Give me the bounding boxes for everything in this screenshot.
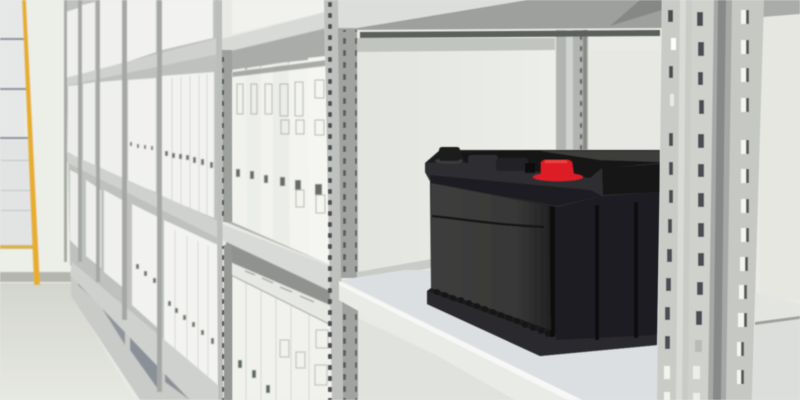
upright holes column one [664,10,676,400]
battery top surface [460,150,660,178]
lower shelf bay boxes [226,240,332,400]
box seams [172,74,208,383]
upper box tops [232,0,325,34]
battery [425,147,660,356]
far left wall [0,0,72,285]
negative terminal [435,147,463,164]
upright at x=220 [216,0,232,400]
floor plinth under shelves [71,266,218,400]
front shelf under space [358,318,530,400]
upright central groove [708,0,734,400]
battery vent caps [468,155,535,173]
battery silhouette [425,150,660,356]
back shelf upright [556,30,588,150]
upright main left channel [657,0,716,400]
receding upper shelf backs and boxes [65,0,218,400]
middle shelf upright at x=325 [324,0,358,400]
battery front right face [556,188,660,340]
battery base ribs [434,289,551,337]
floor [0,283,135,400]
receding shelf uprights [64,0,162,392]
distant boxes [0,0,34,249]
battery left side face [431,183,551,330]
middle shelf bay boxes [226,26,331,265]
right side shelf section [752,292,800,400]
battery lid [425,162,660,207]
front shelf upright [657,0,764,400]
red positive terminal cap [533,160,583,181]
upright right channel [726,0,764,400]
upright holes column two [693,12,704,400]
battery base flange [427,291,657,356]
wall behind battery [555,50,660,280]
front shelf top surface [340,270,660,400]
shelf boards, middle upright [218,12,335,293]
dark box labels [130,142,214,344]
yellow ladder upright [22,0,40,285]
large side panel behind battery [216,0,800,400]
upright holes column three [737,10,749,384]
shelf boards, receding [65,38,222,400]
front shelf back rim [357,259,432,280]
upper right shelf board [335,0,527,30]
front shelf edge [339,281,582,400]
